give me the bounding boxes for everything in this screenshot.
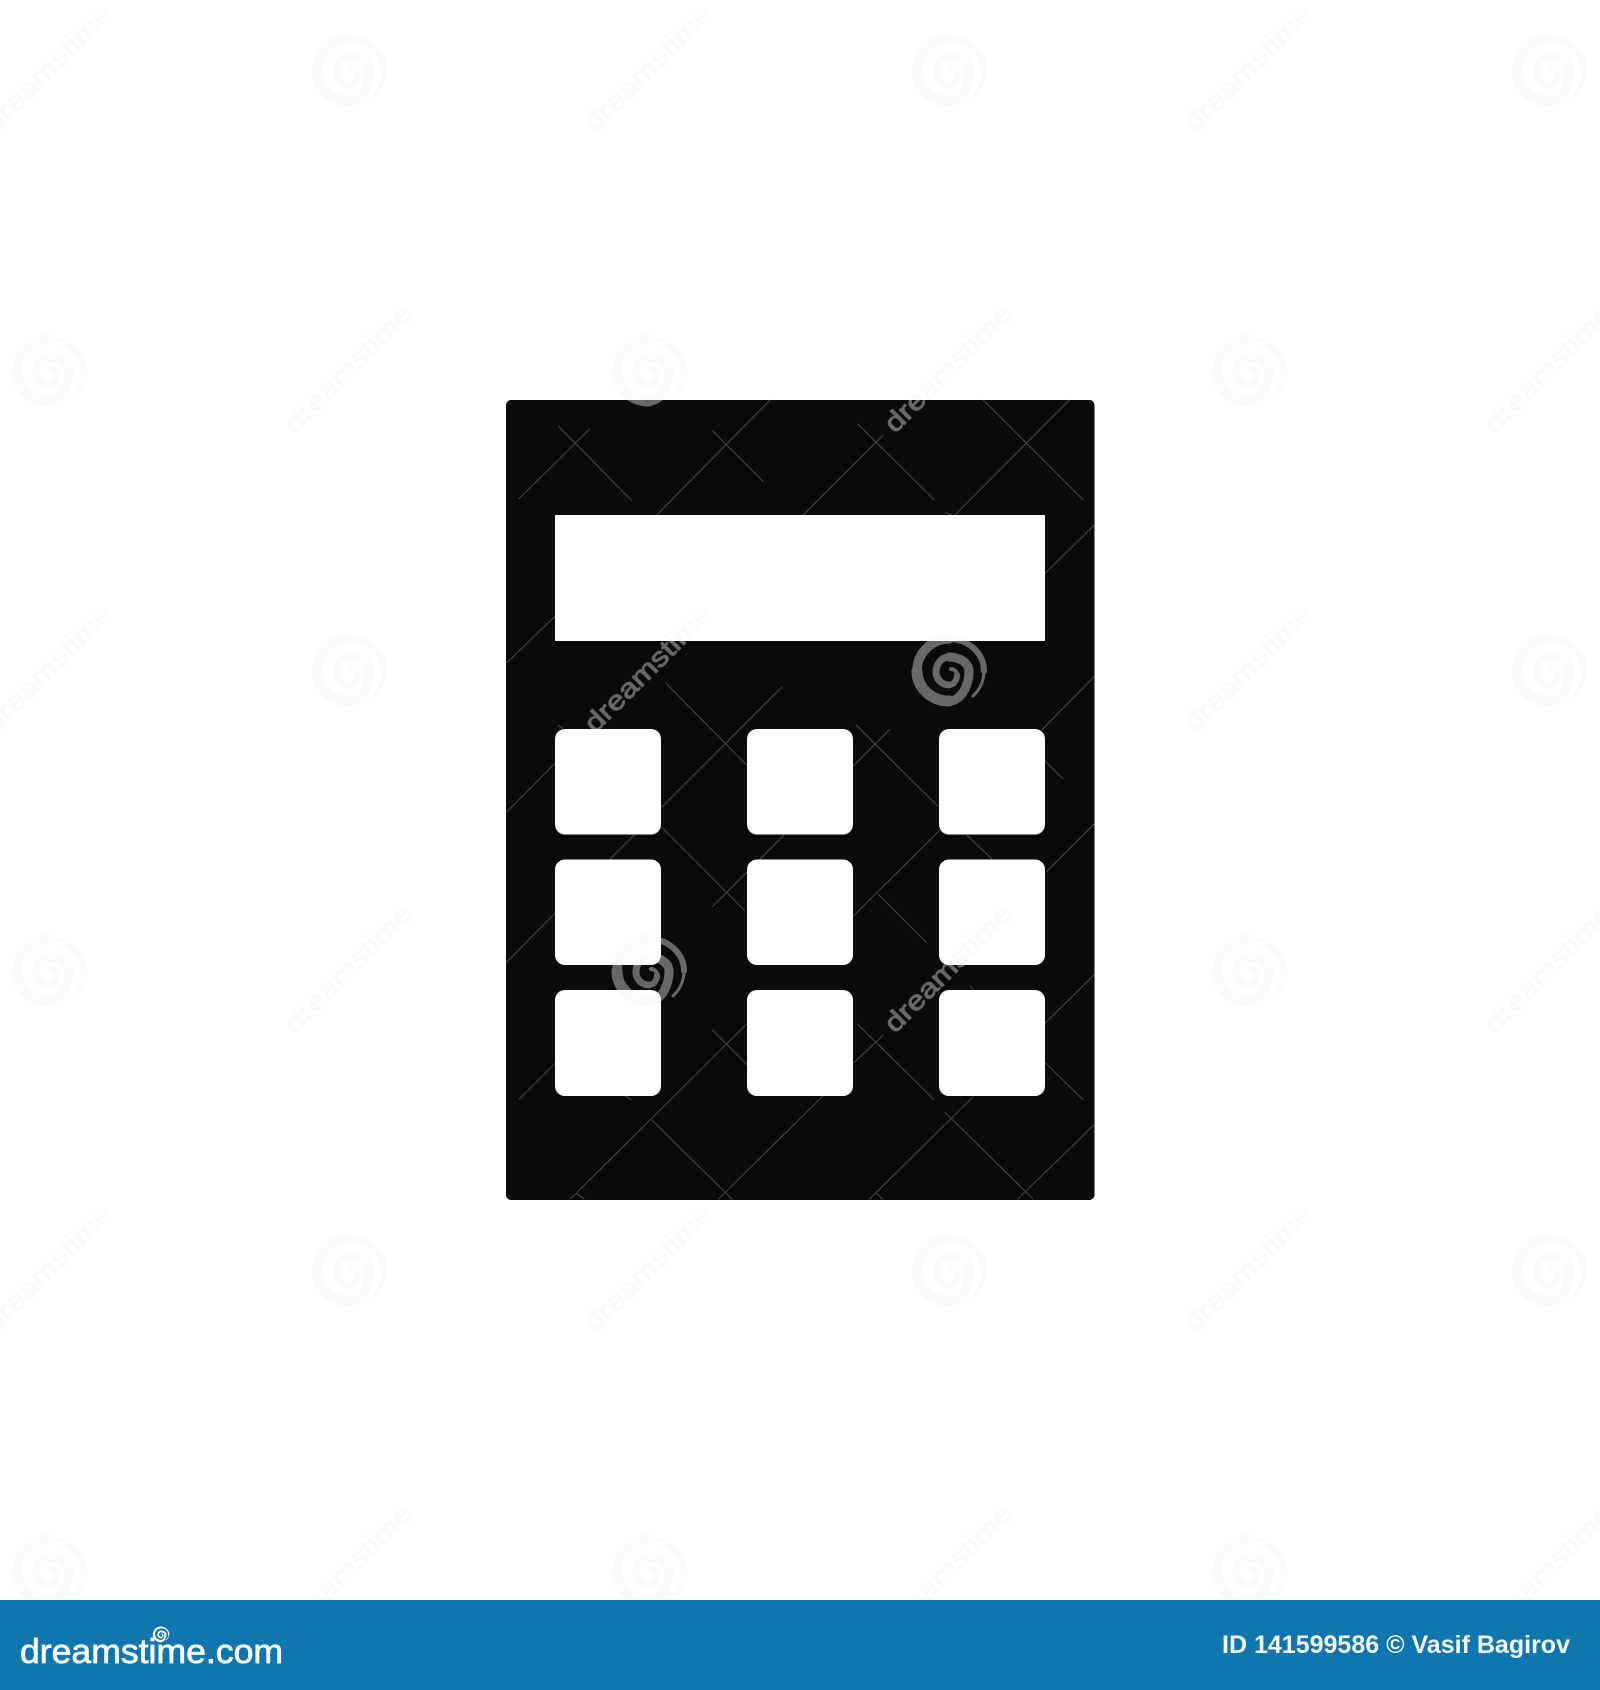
- watermark wordmarks: dreamstime: [578, 0, 718, 138]
- footer logo wordmark: dreamstime.com: [20, 1633, 283, 1671]
- watermark wordmarks: dreamstime: [278, 298, 418, 438]
- watermark hairlines on body: [506, 400, 1094, 1199]
- watermark wordmarks: dreamstime: [878, 1498, 1018, 1638]
- footer logo spiral: [154, 1627, 169, 1641]
- watermark wordmarks: dreamstime: [1478, 1498, 1600, 1638]
- watermark wordmarks: dreamstime: [278, 898, 418, 1038]
- footer band: [0, 1600, 1600, 1690]
- watermark wordmarks: dreamstime: [1478, 298, 1600, 438]
- image id and credit: ID 141599586 © Vasif Bagirov: [1222, 1631, 1570, 1659]
- calculator display: [555, 515, 1045, 641]
- calculator icon: [506, 400, 1094, 1200]
- watermark wordmarks: dreamstime: [278, 1498, 418, 1638]
- footer background: [0, 1600, 1600, 1690]
- watermark wordmarks: dreamstime: [878, 898, 1018, 1038]
- watermark wordmarks: dreamstime: [1478, 898, 1600, 1038]
- watermark wordmarks: dreamstime: [578, 598, 718, 738]
- calculator body: [506, 400, 1094, 1200]
- calculator keypad: [555, 729, 1045, 1096]
- watermark wordmarks: dreamstime: [878, 298, 1018, 438]
- watermark wordmarks: dreamstime: [1178, 0, 1318, 138]
- watermark wordmarks: dreamstime: [1178, 598, 1318, 738]
- watermark wordmarks: dreamstime: [1178, 1198, 1318, 1338]
- watermark wordmarks: dreamstime: [578, 1198, 718, 1338]
